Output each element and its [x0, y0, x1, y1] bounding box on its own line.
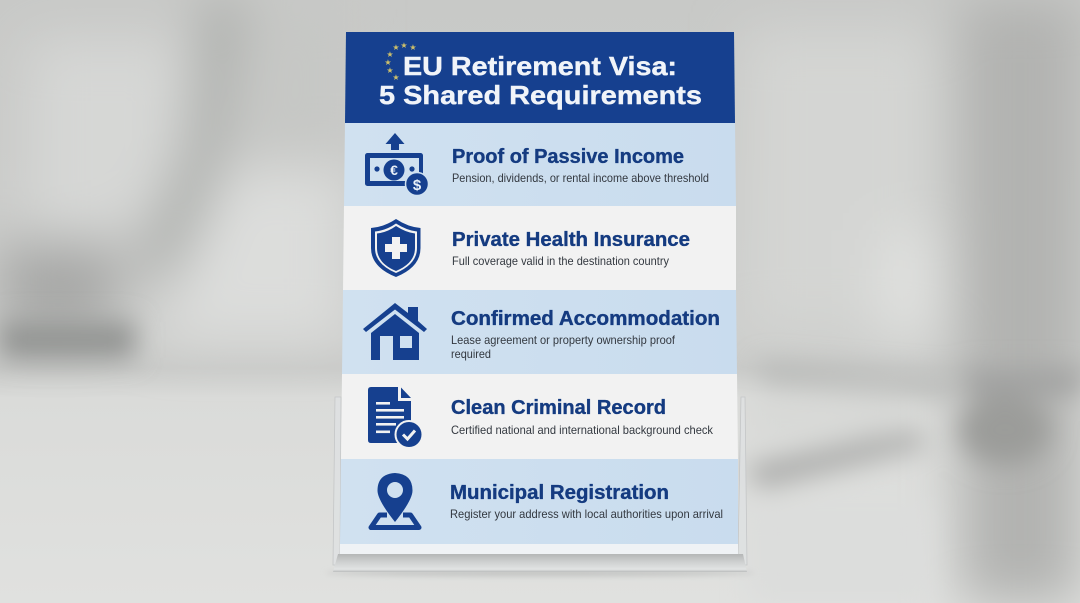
row 4: criminal record: [341, 374, 738, 459]
back strip: [340, 544, 738, 554]
icon: EU stars arc: ★: [384, 58, 392, 67]
description: Register your address with local authorities upon arrival: [450, 507, 723, 521]
icon: EU stars arc: [384, 41, 417, 82]
description: [451, 333, 676, 361]
icon: map pin: [371, 473, 419, 528]
icon: money: [365, 133, 428, 196]
description: Pension, dividends, or rental income above threshold: [452, 171, 709, 185]
row 5: municipal registration: [340, 459, 738, 544]
icon: EU stars arc: ★: [392, 73, 400, 82]
icon: EU stars arc: ★: [400, 41, 408, 50]
description: Full coverage valid in the destination country: [452, 254, 669, 268]
heading: Clean Criminal Record: [451, 397, 666, 419]
title: [379, 51, 702, 110]
icon: document check: [368, 387, 422, 448]
icon: shield: [371, 219, 420, 277]
row 1: passive income: [344, 123, 736, 206]
heading: Proof of Passive Income: [452, 146, 684, 168]
description: Certified national and international background check: [451, 423, 714, 437]
icon: money: €: [390, 162, 398, 178]
title: 5 Shared Requirements: [379, 80, 702, 110]
heading: Confirmed Accommodation: [451, 308, 720, 330]
header band: [345, 32, 735, 123]
acrylic sign holder: [325, 397, 755, 576]
description: Lease agreement or property ownership proof: [451, 333, 676, 347]
row 3: accommodation: [342, 290, 737, 374]
title: EU Retirement Visa:: [403, 51, 677, 81]
sign panel: [340, 32, 738, 554]
icon: EU stars arc: ★: [386, 66, 394, 75]
description: required: [451, 347, 491, 361]
icon: EU stars arc: ★: [409, 43, 417, 52]
icon: house: [363, 303, 427, 360]
icon: EU stars arc: ★: [392, 43, 400, 52]
icon: EU stars arc: ★: [386, 50, 394, 59]
heading: Private Health Insurance: [452, 229, 690, 251]
icon: money: $: [413, 177, 422, 194]
heading: Municipal Registration: [450, 482, 669, 504]
row 2: health insurance: [343, 206, 736, 290]
